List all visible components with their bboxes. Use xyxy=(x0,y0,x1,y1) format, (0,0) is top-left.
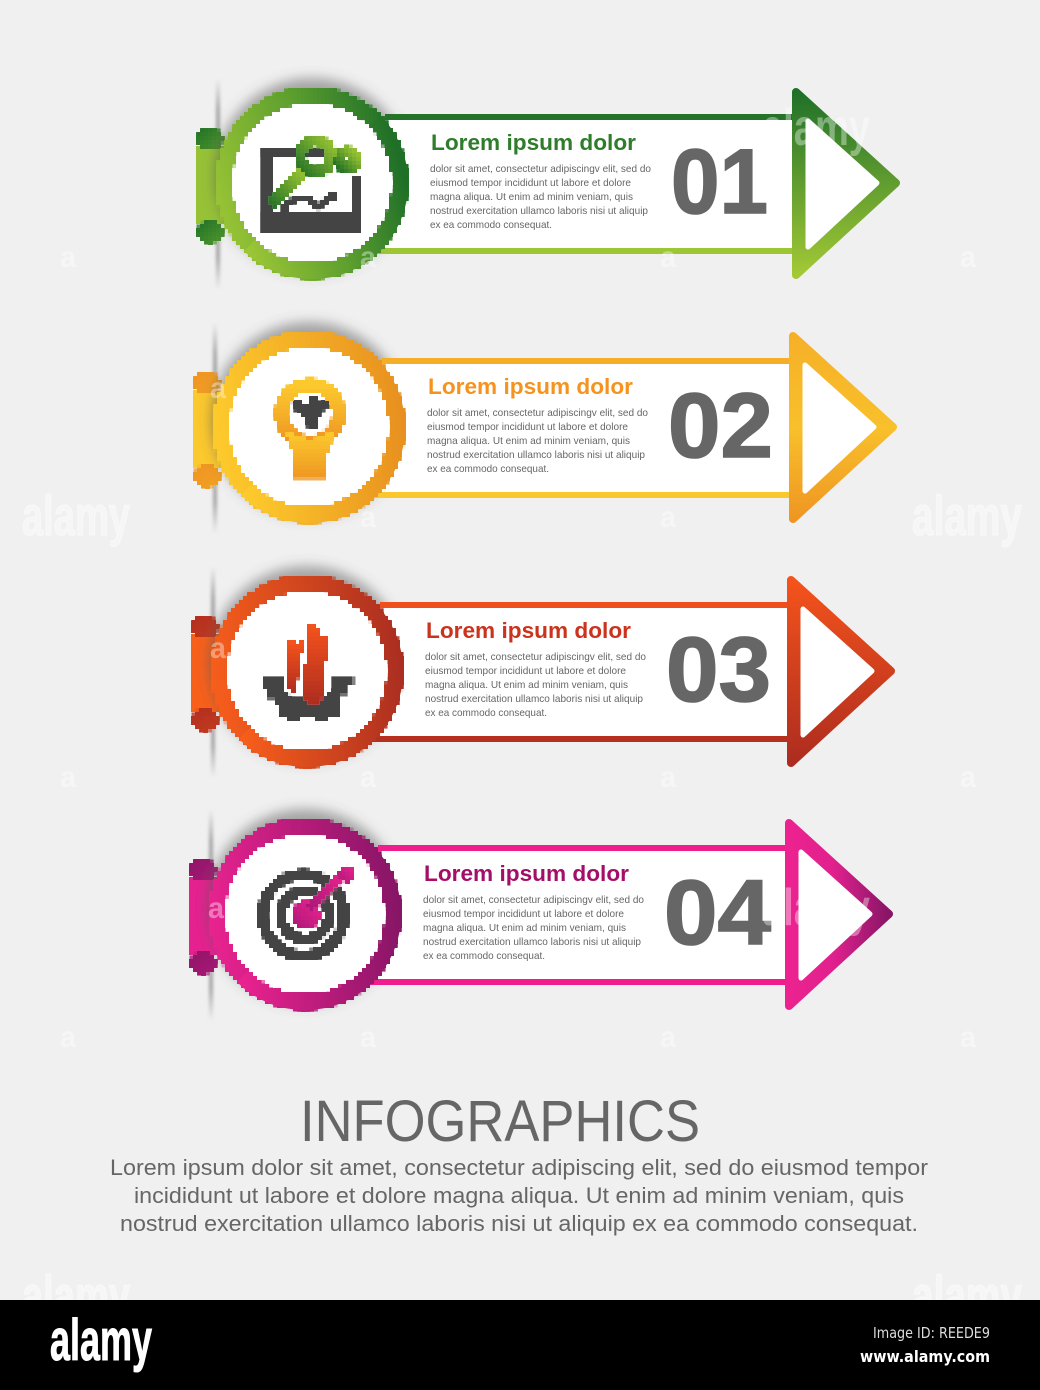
heading: Lorem ipsum dolor xyxy=(428,374,633,399)
icon: light bulb xyxy=(281,385,339,478)
number: 03 xyxy=(666,619,771,721)
ribbon tab xyxy=(193,372,227,487)
description paragraph xyxy=(110,1155,928,1236)
number: 04 xyxy=(664,862,771,964)
icon: picture and magnifier xyxy=(262,141,362,232)
banner body xyxy=(353,845,803,985)
number: 01 xyxy=(671,131,768,233)
vertical fold shadow xyxy=(209,809,213,1021)
vertical fold shadow xyxy=(211,566,215,778)
number: 02 xyxy=(668,375,773,477)
watermarks: a xyxy=(660,501,676,534)
watermarks: alamy xyxy=(22,484,130,547)
watermarks: a xyxy=(208,892,224,925)
text block xyxy=(427,407,648,475)
watermarks: a xyxy=(960,1021,976,1054)
circle badge xyxy=(209,818,401,1010)
text block: eiusmod tempor incididunt ut labore et dolore xyxy=(427,421,628,433)
ribbon tab xyxy=(191,616,225,731)
watermarks: a xyxy=(360,501,376,534)
website: www.alamy.com xyxy=(860,1347,990,1366)
ribbon tab xyxy=(196,128,230,243)
banner body xyxy=(357,358,807,498)
arrow head xyxy=(793,336,893,519)
panel: step 04 xyxy=(189,809,889,1021)
watermarks: alamy xyxy=(22,1264,130,1327)
description paragraph: Lorem ipsum dolor sit amet, consectetur adipiscing elit, sed do eiusmod tempor xyxy=(110,1155,928,1180)
watermarks: a xyxy=(960,761,976,794)
circle badge xyxy=(216,87,408,279)
watermarks: a xyxy=(660,761,676,794)
text block: ex ea commodo consequat. xyxy=(427,463,549,475)
circle shadow xyxy=(214,78,410,274)
text block: ex ea commodo consequat. xyxy=(430,219,552,231)
heading: Lorem ipsum dolor xyxy=(431,130,636,155)
watermarks: a xyxy=(360,241,376,274)
watermarks: alamy xyxy=(762,879,870,937)
text block: eiusmod tempor incididunt ut labore et dolore xyxy=(430,177,631,189)
text block: dolor sit amet, consectetur adipiscingv elit, sed do xyxy=(423,894,644,906)
arrow head xyxy=(789,823,889,1006)
text block: magna aliqua. Ut enim ad minim veniam, quis xyxy=(427,435,630,447)
image id: Image ID: REEDE9 xyxy=(873,1324,990,1342)
text block: dolor sit amet, consectetur adipiscingv elit, sed do xyxy=(427,407,648,419)
description paragraph: nostrud exercitation ullamco laboris nisi ut aliquip ex ea commodo consequat. xyxy=(120,1211,918,1236)
circle shadow xyxy=(209,566,405,762)
banner body xyxy=(355,602,805,742)
watermarks: alamy xyxy=(762,99,870,157)
watermarks: a xyxy=(210,632,226,665)
arrow head xyxy=(791,580,891,763)
panel: step 01 xyxy=(196,78,896,290)
icon: flame over bowl xyxy=(262,624,353,719)
text block: magna aliqua. Ut enim ad minim veniam, quis xyxy=(423,922,626,934)
watermarks: a xyxy=(360,761,376,794)
text block: dolor sit amet, consectetur adipiscingv elit, sed do xyxy=(430,163,651,175)
circle shadow xyxy=(211,322,407,518)
panel: step 03 xyxy=(191,566,891,778)
text block: ex ea commodo consequat. xyxy=(425,707,547,719)
watermarks: a xyxy=(660,241,676,274)
panel: step 02 xyxy=(193,322,893,534)
watermarks: a xyxy=(360,1021,376,1054)
footer logo: alamy xyxy=(50,1308,152,1373)
footer bar xyxy=(0,1300,1040,1390)
text block: eiusmod tempor incididunt ut labore et dolore xyxy=(425,665,626,677)
text block xyxy=(423,894,644,962)
vertical fold shadow xyxy=(213,322,217,534)
circle badge xyxy=(211,575,403,767)
text block xyxy=(425,651,646,719)
icon: target with dart xyxy=(263,865,353,956)
text block: nostrud exercitation ullamco laboris nisi ut aliquip xyxy=(425,693,643,705)
text block: dolor sit amet, consectetur adipiscingv elit, sed do xyxy=(425,651,646,663)
text block: magna aliqua. Ut enim ad minim veniam, quis xyxy=(430,191,633,203)
text block: magna aliqua. Ut enim ad minim veniam, quis xyxy=(425,679,628,691)
ribbon tab xyxy=(189,859,223,974)
text block xyxy=(430,163,651,231)
vertical fold shadow xyxy=(216,78,220,290)
heading: Lorem ipsum dolor xyxy=(424,861,629,886)
watermarks: a xyxy=(60,241,76,274)
description paragraph: incididunt ut labore et dolore magna aliqua. Ut enim ad minim veniam, quis xyxy=(134,1183,904,1208)
circle shadow xyxy=(207,809,403,1005)
arrow head xyxy=(796,92,896,275)
watermarks: a xyxy=(960,241,976,274)
circle badge xyxy=(213,331,405,523)
text block: nostrud exercitation ullamco laboris nisi ut aliquip xyxy=(423,936,641,948)
watermarks: a xyxy=(660,1021,676,1054)
watermarks: a xyxy=(210,372,226,405)
text block: ex ea commodo consequat. xyxy=(423,950,545,962)
heading: Lorem ipsum dolor xyxy=(426,618,631,643)
text block: eiusmod tempor incididunt ut labore et dolore xyxy=(423,908,624,920)
text block: nostrud exercitation ullamco laboris nisi ut aliquip xyxy=(427,449,645,461)
watermarks: a xyxy=(60,761,76,794)
text block: nostrud exercitation ullamco laboris nisi ut aliquip xyxy=(430,205,648,217)
banner body xyxy=(360,114,810,254)
watermarks: a xyxy=(60,1021,76,1054)
title: INFOGRAPHICS xyxy=(300,1089,700,1154)
